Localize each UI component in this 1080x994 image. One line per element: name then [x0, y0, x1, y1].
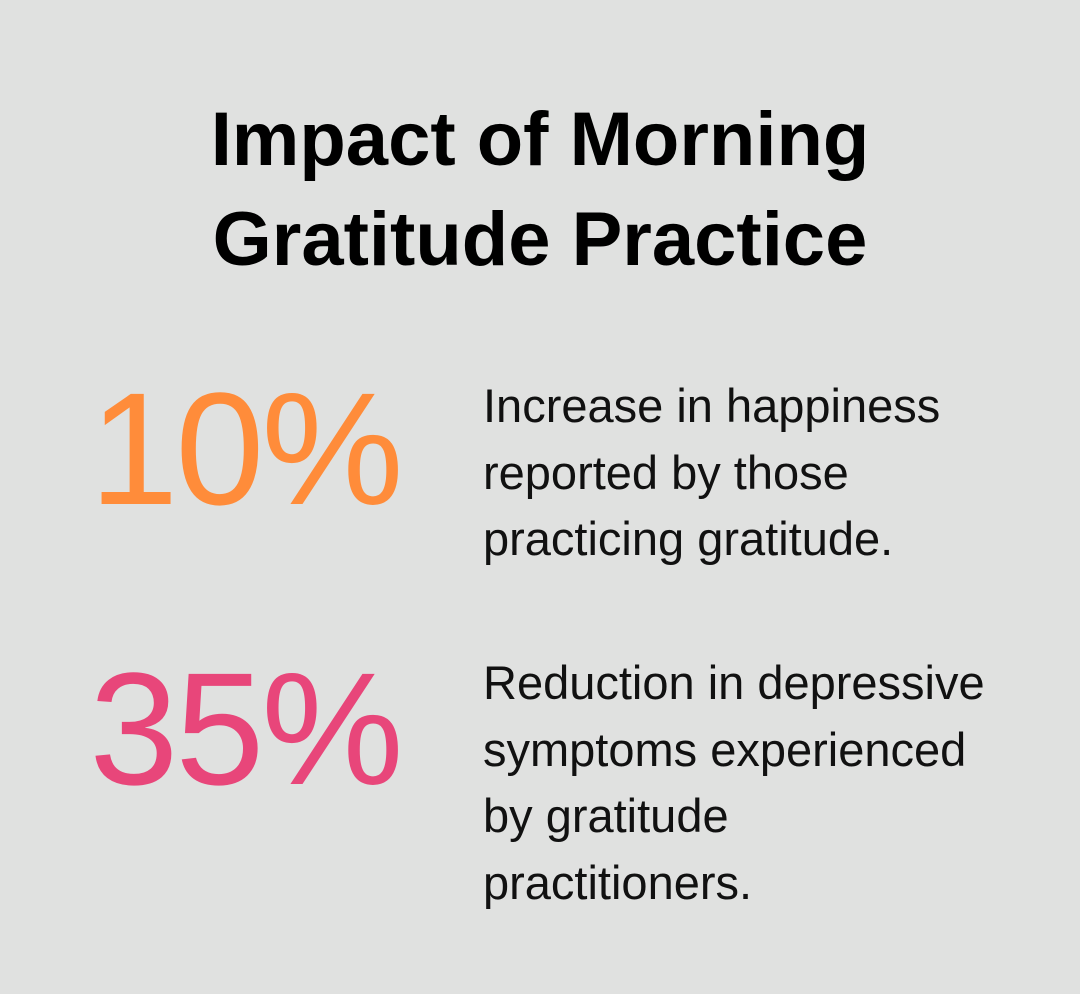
title: Gratitude Practice — [213, 197, 867, 282]
text: happiness description: Increase in happiness — [483, 379, 940, 432]
text: happiness description: reported by those — [483, 446, 849, 498]
stat: 35%: 35% — [89, 639, 401, 818]
text: happiness description: practicing gratitude. — [483, 512, 893, 565]
title: Impact of Morning — [211, 97, 869, 182]
text: depressive symptoms description: Reduction in depressive — [483, 656, 985, 709]
text: depressive symptoms description: symptoms experienced — [483, 722, 966, 776]
text: depressive symptoms description: practitioners. — [483, 856, 752, 908]
text: depressive symptoms description: by gratitude — [483, 789, 729, 842]
text: depressive symptoms description — [483, 656, 985, 909]
text: happiness description — [483, 379, 940, 565]
stat: 10%: 10% — [89, 359, 401, 538]
title — [211, 97, 869, 282]
